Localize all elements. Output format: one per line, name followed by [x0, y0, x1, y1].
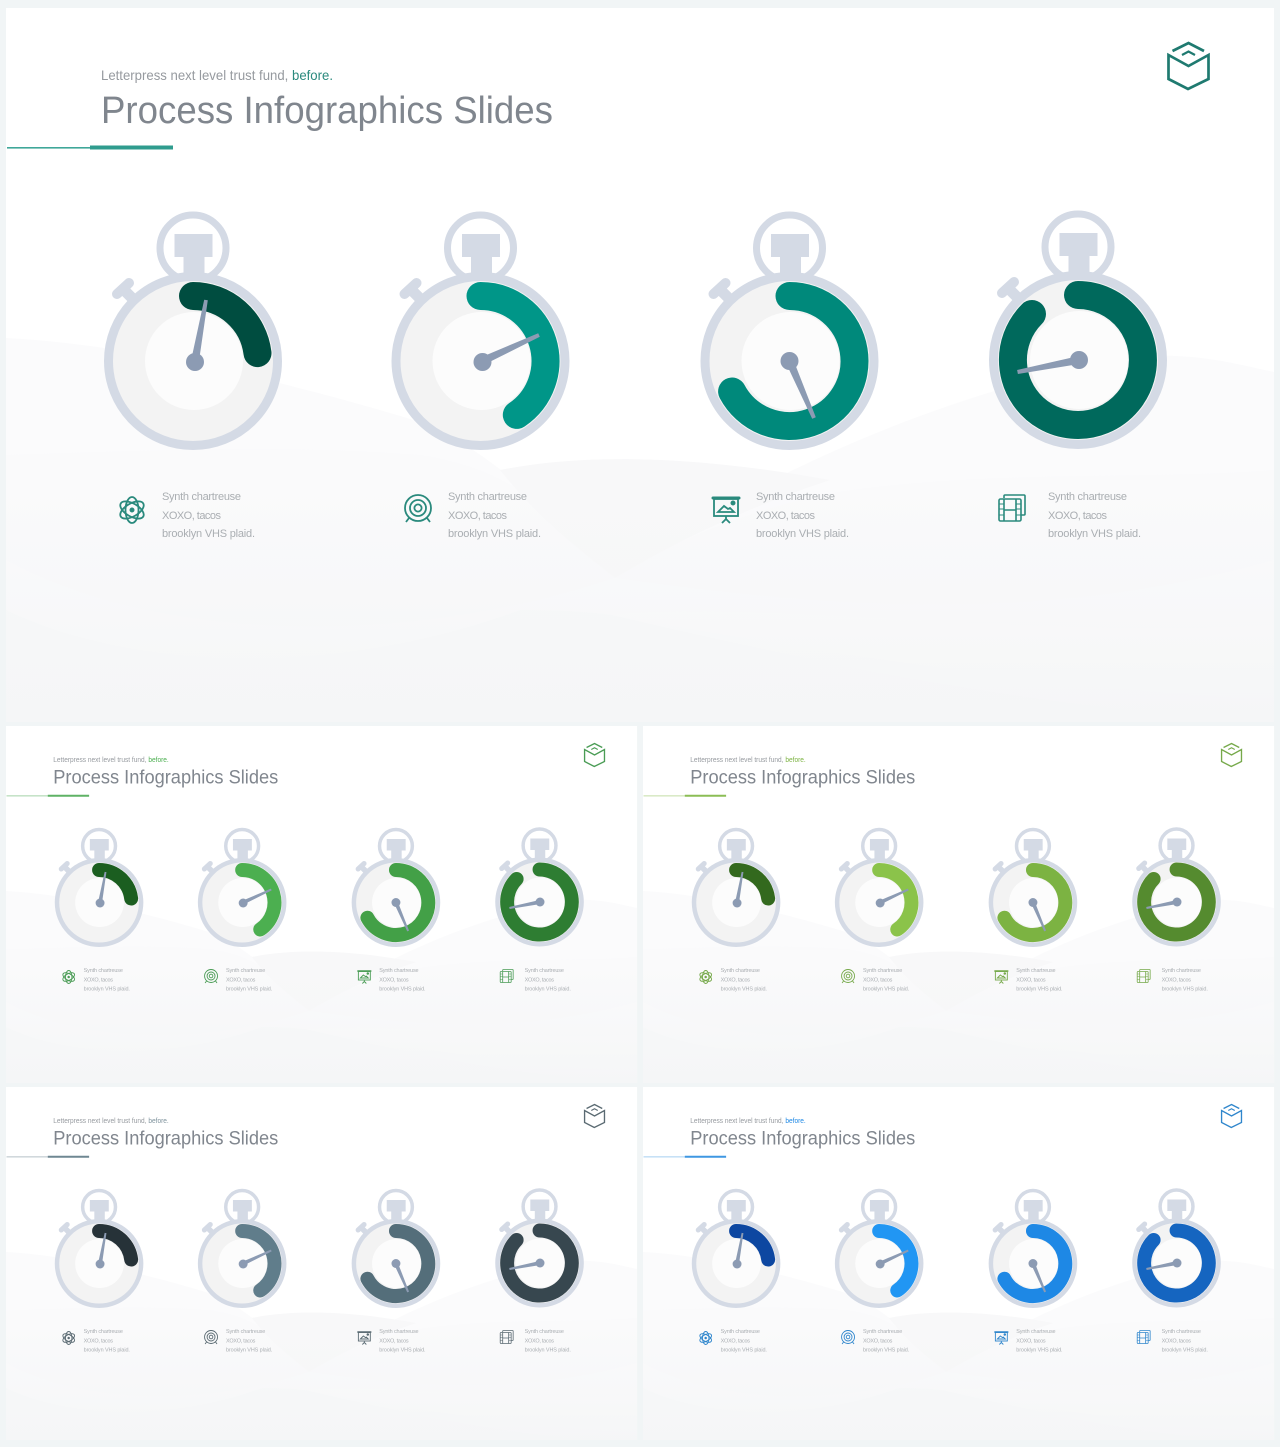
description 4: Synth chartreuse: [1162, 1329, 1201, 1335]
icon: presentation board: [995, 1332, 1008, 1344]
title underline: [7, 146, 173, 150]
description 4: brooklyn VHS plaid.: [525, 986, 571, 993]
description 1: [84, 1329, 130, 1354]
description 2: XOXO, tacos: [226, 977, 256, 984]
description 2: [448, 491, 541, 540]
icon: presentation board: [358, 971, 371, 984]
description 2: [226, 968, 273, 993]
icon: film frames: [500, 1330, 513, 1344]
icon: logo cube: [585, 744, 604, 766]
title underline: [643, 795, 726, 797]
description 2: XOXO, tacos: [863, 1338, 893, 1345]
description 1: XOXO, tacos: [84, 977, 113, 984]
icon: atom: [61, 970, 76, 984]
title: Process Infographics Slides: [53, 767, 278, 789]
stopwatch 1: [57, 830, 141, 945]
icon: presentation board: [995, 971, 1008, 984]
stopwatch 2: [837, 1190, 921, 1306]
description 1: brooklyn VHS plaid.: [84, 986, 130, 993]
description 4: XOXO, tacos: [1048, 510, 1108, 522]
description 1: Synth chartreuse: [162, 491, 241, 503]
description 1: Synth chartreuse: [721, 1329, 760, 1335]
description 2: brooklyn VHS plaid.: [226, 1347, 273, 1354]
stopwatch 2: [396, 215, 565, 446]
description 3: brooklyn VHS plaid.: [1016, 986, 1063, 993]
description 1: brooklyn VHS plaid.: [721, 1347, 767, 1354]
title: Process Infographics Slides: [690, 1128, 915, 1150]
description 1: brooklyn VHS plaid.: [721, 986, 767, 993]
description 2: brooklyn VHS plaid.: [863, 986, 910, 993]
stopwatch 3: [354, 830, 438, 945]
description 3: XOXO, tacos: [379, 1338, 409, 1345]
title: Process Infographics Slides: [101, 90, 553, 132]
title underline: [6, 795, 89, 797]
icon: logo cube: [1222, 744, 1241, 766]
description 2: XOXO, tacos: [863, 977, 893, 984]
icon: target: [205, 1330, 218, 1344]
stopwatch 3: [991, 830, 1075, 945]
description 1: Synth chartreuse: [84, 968, 123, 974]
description 1: brooklyn VHS plaid.: [84, 1347, 130, 1354]
description 2: [863, 968, 910, 993]
stopwatch 2: [837, 830, 921, 945]
description 4: brooklyn VHS plaid.: [1162, 986, 1208, 993]
slide: blue: [643, 1087, 1274, 1444]
subtitle: Letterpress next level trust fund, before.: [53, 757, 169, 764]
slide: lime: [643, 726, 1274, 1083]
stopwatch 3: [354, 1190, 438, 1306]
description 3: [379, 1329, 426, 1354]
icon: presentation board: [713, 498, 739, 523]
description 4: Synth chartreuse: [1162, 968, 1201, 974]
description 3: Synth chartreuse: [379, 968, 419, 974]
description 3: XOXO, tacos: [379, 977, 409, 984]
description 4: XOXO, tacos: [525, 1338, 554, 1345]
description 2: XOXO, tacos: [226, 1338, 256, 1345]
description 1: [721, 1329, 767, 1354]
description 4: XOXO, tacos: [525, 977, 554, 984]
description 2: XOXO, tacos: [448, 510, 508, 522]
description 1: [721, 968, 767, 993]
description 3: brooklyn VHS plaid.: [1016, 1347, 1063, 1354]
slide: slate: [6, 1087, 637, 1444]
stopwatch 2: [200, 830, 284, 945]
subtitle: Letterpress next level trust fund, before.: [101, 67, 333, 83]
description 3: brooklyn VHS plaid.: [756, 528, 849, 540]
description 3: brooklyn VHS plaid.: [379, 1347, 426, 1354]
description 3: XOXO, tacos: [756, 510, 816, 522]
description 4: [1162, 968, 1208, 993]
description 1: XOXO, tacos: [721, 977, 750, 984]
description 3: [379, 968, 426, 993]
description 4: Synth chartreuse: [525, 968, 564, 974]
subtitle: Letterpress next level trust fund, before.: [690, 757, 806, 764]
description 4: brooklyn VHS plaid.: [1048, 528, 1141, 540]
description 2: [863, 1329, 910, 1354]
stopwatch 1: [57, 1190, 141, 1306]
stopwatch 1: [694, 830, 778, 945]
description 1: XOXO, tacos: [721, 1338, 750, 1345]
description 1: [162, 491, 255, 540]
description 3: Synth chartreuse: [1016, 1329, 1056, 1335]
description 3: Synth chartreuse: [1016, 968, 1056, 974]
description 3: XOXO, tacos: [1016, 977, 1046, 984]
slide: green: [6, 726, 637, 1083]
description 2: Synth chartreuse: [863, 968, 902, 974]
description 2: brooklyn VHS plaid.: [448, 528, 541, 540]
description 2: Synth chartreuse: [226, 1329, 265, 1335]
stopwatch 4: [497, 829, 582, 944]
description 1: Synth chartreuse: [84, 1329, 123, 1335]
subtitle: Letterpress next level trust fund, before.: [690, 1118, 806, 1125]
icon: logo cube: [1168, 43, 1208, 89]
description 3: [1016, 1329, 1063, 1354]
description 1: XOXO, tacos: [84, 1338, 113, 1345]
icon: target: [205, 970, 218, 983]
description 4: brooklyn VHS plaid.: [525, 1347, 571, 1354]
stopwatch 4: [497, 1190, 582, 1305]
title: Process Infographics Slides: [53, 1128, 278, 1150]
icon: film frames: [999, 495, 1025, 521]
description 4: XOXO, tacos: [1162, 1338, 1191, 1345]
icon: target: [842, 970, 855, 983]
stopwatch 1: [694, 1190, 778, 1306]
stopwatch 4: [994, 214, 1162, 444]
stopwatch 4: [1134, 1190, 1219, 1305]
icon: target: [842, 1330, 855, 1344]
description 3: Synth chartreuse: [379, 1329, 419, 1335]
description 4: [1162, 1329, 1208, 1354]
title underline: [643, 1156, 726, 1158]
description 3: [1016, 968, 1063, 993]
title underline: [6, 1156, 89, 1158]
icon: atom: [698, 1332, 713, 1344]
stopwatch 4: [1134, 829, 1219, 944]
icon: film frames: [500, 970, 513, 982]
description 1: XOXO, tacos: [162, 510, 222, 522]
description 2: Synth chartreuse: [863, 1329, 902, 1335]
stopwatch 2: [200, 1190, 284, 1306]
description 2: [226, 1329, 273, 1354]
description 4: [525, 968, 571, 993]
description 2: Synth chartreuse: [448, 491, 527, 503]
main slide: teal: [6, 8, 1274, 722]
title: Process Infographics Slides: [690, 767, 915, 789]
description 4: Synth chartreuse: [525, 1329, 564, 1335]
icon: logo cube: [585, 1104, 604, 1128]
description 3: XOXO, tacos: [1016, 1338, 1046, 1345]
description 4: Synth chartreuse: [1048, 491, 1127, 503]
description 2: brooklyn VHS plaid.: [863, 1347, 910, 1354]
icon: film frames: [1137, 1330, 1150, 1344]
description 3: brooklyn VHS plaid.: [379, 986, 426, 993]
icon: atom: [117, 497, 147, 523]
icon: logo cube: [1222, 1104, 1241, 1128]
description 1: Synth chartreuse: [721, 968, 760, 974]
description 4: brooklyn VHS plaid.: [1162, 1347, 1208, 1354]
description 2: brooklyn VHS plaid.: [226, 986, 273, 993]
icon: atom: [61, 1332, 76, 1344]
description 1: brooklyn VHS plaid.: [162, 528, 255, 540]
description 4: [525, 1329, 571, 1354]
description 1: [84, 968, 130, 993]
subtitle: Letterpress next level trust fund, before.: [53, 1118, 169, 1125]
icon: film frames: [1137, 970, 1150, 982]
icon: atom: [698, 970, 713, 984]
description 3: Synth chartreuse: [756, 491, 835, 503]
stopwatch 3: [991, 1190, 1075, 1306]
description 2: Synth chartreuse: [226, 968, 265, 974]
stopwatch 1: [108, 215, 278, 446]
stopwatch 3: [705, 215, 874, 446]
description 4: [1048, 491, 1141, 540]
icon: target: [405, 495, 431, 522]
description 4: XOXO, tacos: [1162, 977, 1191, 984]
icon: presentation board: [358, 1332, 371, 1344]
description 3: [756, 491, 849, 540]
